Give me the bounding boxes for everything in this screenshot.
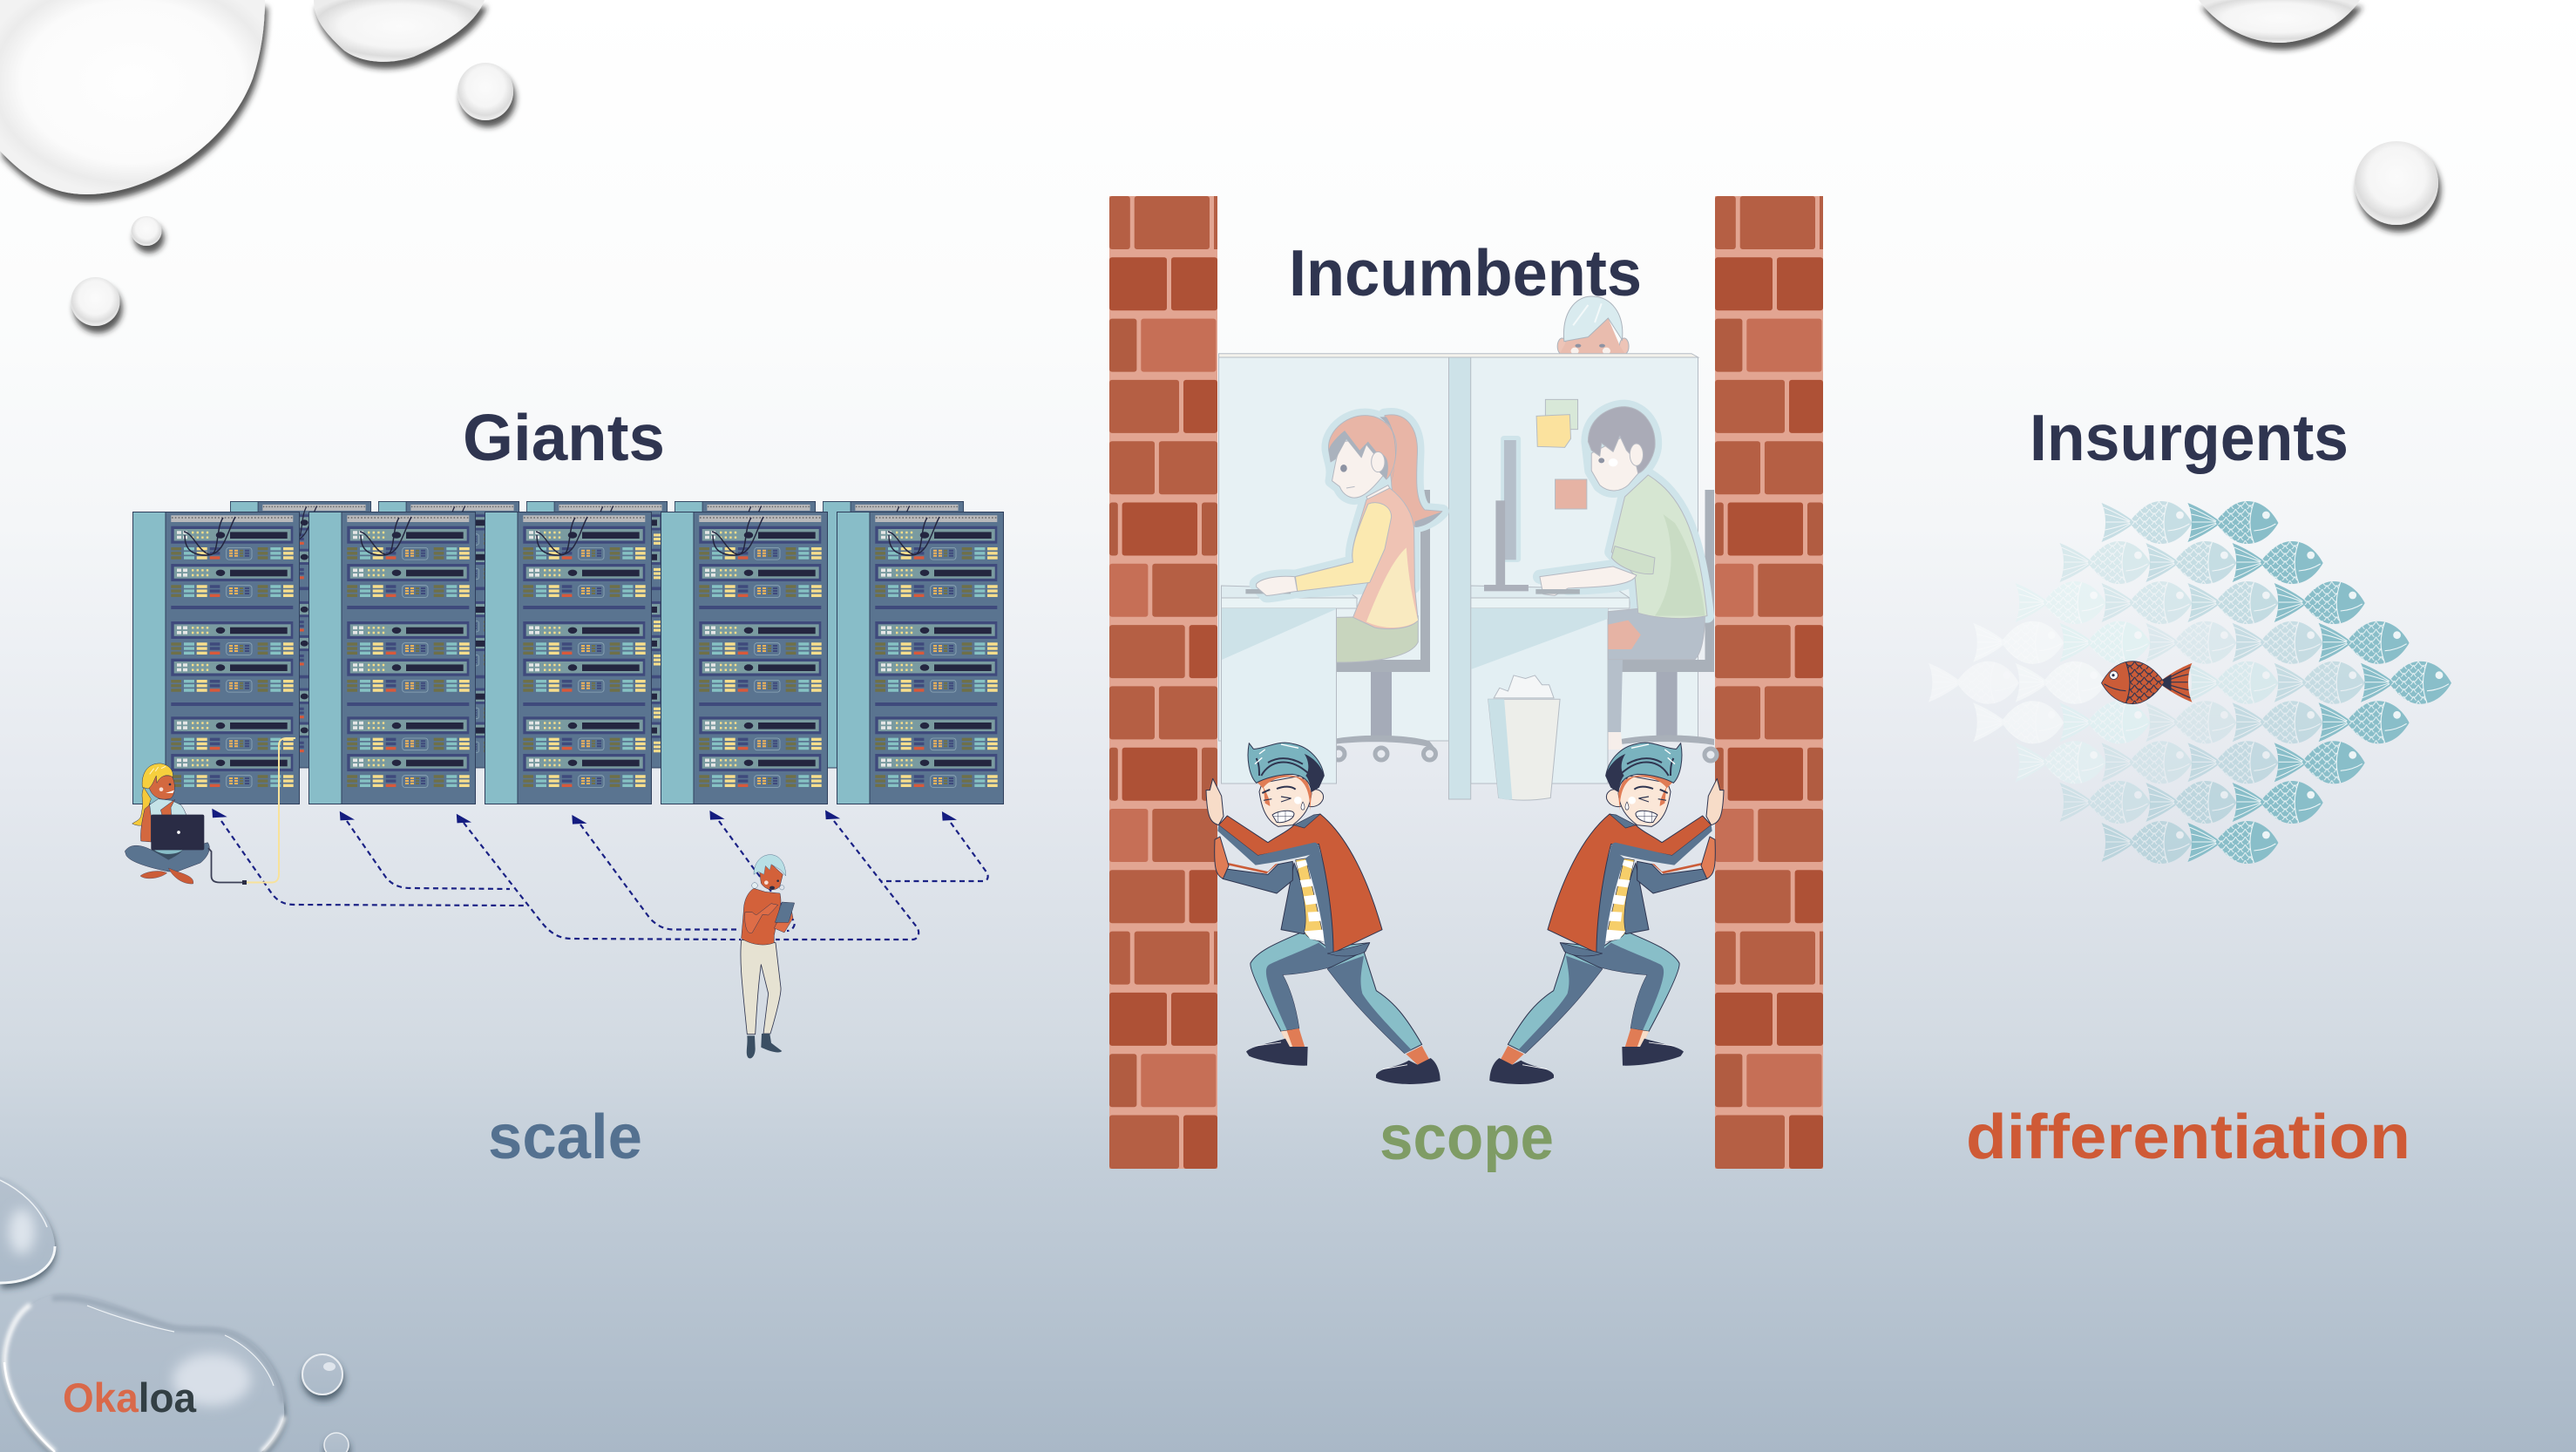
left chair [1332,490,1436,760]
waste bin [1488,675,1560,800]
heading: Incumbents: Incumbents [1289,236,1642,309]
heading: Giants: Giants [463,401,665,474]
right chair [1620,490,1717,761]
office cubicles [1218,296,1717,800]
heading: scale: scale [488,1103,642,1172]
heading: scope: scope [1380,1103,1554,1173]
logo: Okaloa: Okaloa [63,1374,197,1421]
cubicle panel [1218,357,1698,741]
seated woman [1245,415,1442,662]
figure: woman sitting with laptop [125,763,209,884]
fish school [1929,501,2451,864]
front row of racks [132,512,1004,804]
figure: man pushing right wall [1489,743,1724,1084]
droplets: top left [0,0,513,326]
laptop cable [208,738,295,885]
server racks [132,501,1004,804]
right desk [1471,586,1630,784]
left desk [1222,586,1357,784]
heading: Insurgents: Insurgents [2030,401,2349,474]
red fish swimming against the school [2102,662,2193,704]
droplets: top right [2199,0,2438,225]
back row of racks [230,501,964,768]
centre column [1448,357,1471,799]
monitor [1484,436,1529,591]
right man's leg [1608,660,1623,732]
sticky notes [1536,399,1587,509]
brick wall: left [1109,196,1217,1169]
seated man [1535,407,1707,660]
figure: man pushing left wall [1206,743,1441,1084]
brick wall: right [1715,196,1823,1169]
figure: person with tablet [741,855,795,1058]
dashed network arrows [221,821,988,940]
droplets: bottom left [0,1177,349,1452]
peeking head [1557,296,1629,355]
arrowheads [212,809,957,824]
heading: differentiation: differentiation [1966,1103,2410,1172]
